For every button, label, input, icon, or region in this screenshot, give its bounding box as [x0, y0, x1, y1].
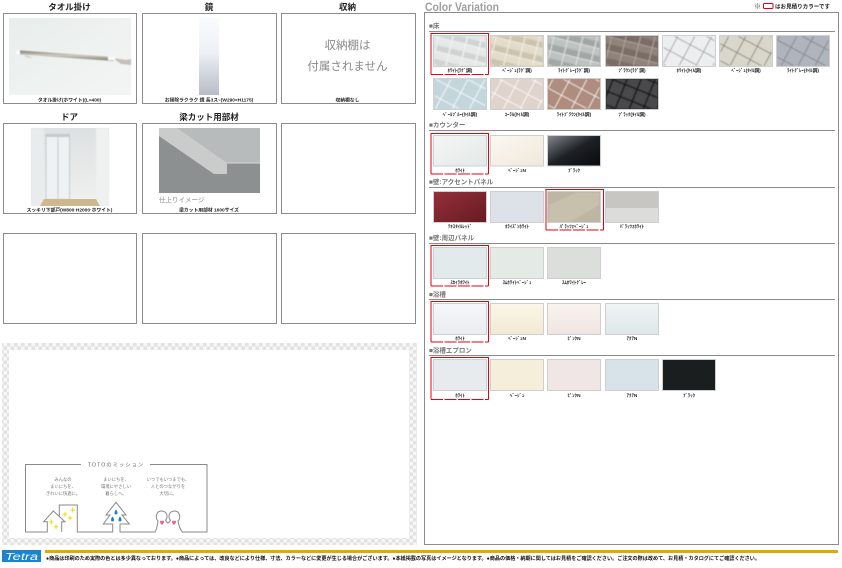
- swatch: palazzo white: ﾊﾟﾗｯﾂｫﾎﾜｲﾄ: [620, 224, 645, 230]
- heading: storage: 収納: [339, 2, 356, 12]
- estimate marker: [431, 34, 488, 74]
- swatch: beige: [490, 360, 544, 399]
- swatch: aqua N: [606, 304, 658, 342]
- swatch: beige: ﾍﾞｰｼﾞｭ: [510, 393, 525, 399]
- caption: storage: 収納棚なし: [336, 96, 360, 104]
- swatch: beige: [490, 136, 544, 174]
- caption: mirror: お掃除ラクラク 鏡 長3ス~(W290×H1175): [165, 96, 254, 104]
- estimate marker: [431, 302, 488, 342]
- swatch: light grey tile: ﾗｲﾄｸﾞﾚｰ(ﾀｲﾙ調): [787, 67, 819, 74]
- swatch: sky white: ｽｶｲﾗﾎﾜｲﾄ: [450, 280, 470, 286]
- section: bathtub: [429, 290, 835, 342]
- swatch: light brown tile: [548, 78, 600, 118]
- mission title: TOTOのミッション: [88, 462, 144, 468]
- heading: bathtub apron: ■浴槽エプロン: [429, 346, 472, 354]
- swatch: lumi white grey: ｽﾑﾎﾜｲﾄｸﾞﾚｰ: [562, 279, 587, 286]
- swatch: light grey rag: ﾗｲﾄｸﾞﾚｰ(ﾗｸﾞ調): [558, 67, 590, 74]
- swatch: beige rag: [490, 36, 544, 74]
- swatch: aqua N: [606, 360, 658, 399]
- swatch: white: ﾎﾜｲﾄ: [455, 168, 465, 174]
- swatch: beige N: [490, 304, 544, 342]
- mission text 1: まいにちを、: [50, 483, 76, 490]
- swatch: black: ﾌﾞﾗｯｸ: [683, 392, 696, 399]
- mission text 3: [147, 477, 189, 497]
- swatch: beige tile: ﾍﾞｰｼﾞｭ(ﾀｲﾙ調): [731, 67, 761, 74]
- caption: beam: 梁カット用部材 1600サイズ: [179, 206, 239, 214]
- swatch: white: [434, 360, 486, 399]
- image: mirror: [199, 18, 219, 95]
- swatch: pink N: [548, 304, 600, 342]
- heading: door: ドア: [61, 112, 78, 122]
- swatch: horizon white: [490, 192, 544, 230]
- title: Color Variation: Color Variation: [425, 2, 499, 14]
- empty panel row 2: [282, 124, 416, 214]
- mission text 3: 人とのつながりを: [151, 483, 185, 490]
- image: beam: [159, 128, 260, 193]
- estimate marker: [431, 358, 488, 400]
- panel: towel bar: [4, 14, 136, 104]
- swatch: black: [662, 360, 716, 399]
- section: accent panel: [429, 177, 835, 230]
- heading: surrounding panel: ■壁:周辺パネル: [429, 233, 475, 242]
- swatch: black: ﾌﾞﾗｯｸ: [568, 167, 581, 174]
- swatch: beige tile: [720, 36, 772, 74]
- swatch: black: [548, 136, 600, 174]
- panel: beam cut part: [142, 124, 276, 214]
- panel: storage: [282, 14, 416, 104]
- heading: bathtub: ■浴槽: [429, 290, 446, 298]
- mission text 2: 環境にやさしい: [101, 483, 131, 490]
- footer note: ●商品は印刷のため実際の色とは多少異なっております。●商品によっては、改良などにより仕様、寸法、カラーなどに変更が生じる場合がございます。●本紙掲載の写真はイメージとなります。●商品の価格・納期に関してはお見積をご確認ください。ご注文の際は改めて、お見積・カタログにてご確認ください。: [46, 554, 760, 562]
- caption: door: スッキリ下部戸(W800·H2000·ホワイト): [27, 206, 113, 214]
- mission text 2: まいにちを、: [103, 476, 129, 483]
- swatch: palazzo beige: [548, 192, 600, 230]
- swatch: lumi white beige: [490, 248, 544, 286]
- swatch: white tile: ﾎﾜｲﾄ(ﾀｲﾙ調): [677, 67, 702, 74]
- swatch: palazzo white: [606, 192, 658, 230]
- icon: hearts: [160, 521, 176, 525]
- swatch: sky white: [434, 248, 486, 286]
- panel: mirror: [142, 14, 276, 104]
- mission text 2: 暮らしへ。: [105, 490, 127, 497]
- panel: door: [4, 124, 136, 214]
- heading: counter: ■カウンター: [429, 120, 465, 129]
- image note: 仕上りイメージ: [159, 195, 205, 204]
- swatch: pink N: ﾋﾟﾝｸN: [567, 335, 581, 342]
- swatch: black tile: ﾌﾞﾗｯｸ(ﾀｲﾙ調): [618, 111, 646, 118]
- swatch: beige: ﾍﾞｰｼﾞｭN: [508, 168, 526, 174]
- estimate marker: [546, 190, 604, 230]
- heading: mirror: 鏡: [205, 2, 214, 12]
- swatch: white tile: [662, 36, 716, 74]
- icon: sparkles: [49, 508, 75, 529]
- heading: accent panel: ■壁:アクセントパネル: [429, 177, 494, 186]
- swatch: light grey rag: [548, 36, 600, 74]
- swatch: white rag: ﾎﾜｲﾄ(ﾗｸﾞ調): [448, 67, 473, 74]
- empty panel row 3 right: [282, 234, 416, 324]
- mission text 1: [46, 476, 80, 497]
- section: counter: [429, 120, 835, 174]
- TOTO mission: [26, 462, 207, 532]
- mission text 2: [101, 476, 131, 497]
- mission text 3: 大切に。: [159, 490, 177, 497]
- swatch: pink N: ﾋﾟﾝｸN: [567, 392, 581, 399]
- estimate marker: [431, 246, 488, 286]
- swatch: textile red: ﾃｷｽﾀｲﾙﾚｯﾄﾞ: [448, 223, 472, 230]
- swatch: pink N: [548, 360, 600, 399]
- notice: no storage shelf: 付属されません: [307, 60, 388, 73]
- estimate marker: [431, 134, 488, 174]
- swatch: lumi white grey: [548, 248, 600, 286]
- heading: floor: ■床: [429, 22, 440, 30]
- mission outline with houses, tree, people: [26, 464, 207, 532]
- swatch: pale blue tile: [434, 78, 486, 118]
- swatch: white: ﾎﾜｲﾄ: [455, 336, 465, 342]
- mission text 1: みんなの: [54, 476, 72, 483]
- swatch: beige N: ﾍﾞｰｼﾞｭN: [508, 336, 526, 342]
- footer rule: [45, 550, 838, 553]
- section: floor: [429, 22, 835, 118]
- swatch: textile red: [434, 192, 486, 230]
- section: surrounding panel: [429, 233, 835, 286]
- panel: checker frame: [2, 343, 417, 545]
- panel: color variation: [424, 12, 838, 544]
- logo: Tetra: Tetra: [5, 552, 39, 563]
- image: towel bar: [9, 18, 131, 95]
- swatch: light grey tile: [776, 36, 830, 74]
- swatch: palazzo beige: ﾊﾟﾗｯﾂｫﾍﾞｰｼﾞｭ: [560, 224, 589, 230]
- heading: beam cut part: 梁カット用部材: [179, 112, 239, 122]
- swatch: white: [434, 304, 486, 342]
- legend: estimate color: はお見積りカラーです: [775, 2, 830, 10]
- swatch: coral tile: ｺｰﾗﾙ(ﾀｲﾙ調): [505, 111, 530, 118]
- swatch: beige rag: ﾍﾞｰｼﾞｭ(ﾗｸﾞ調): [502, 67, 532, 74]
- swatch: black tile: [606, 78, 658, 118]
- section: bathtub apron: [429, 346, 835, 400]
- swatch: brown rag: [606, 36, 658, 74]
- mission text 1: きれいに快適に。: [46, 490, 80, 497]
- swatch: pale blue tile: ﾍﾟｰﾙﾌﾞﾙｰ(ﾀｲﾙ調): [443, 111, 478, 118]
- image: door: [31, 128, 109, 206]
- notice: no storage shelf: 収納棚は: [324, 38, 370, 52]
- legend: estimate color: [754, 2, 830, 10]
- swatch: white: [434, 136, 486, 174]
- swatch: coral tile: [490, 78, 544, 118]
- swatch: white rag: [434, 36, 486, 74]
- swatch: brown rag: ﾌﾞﾗｳﾝ(ﾗｸﾞ調): [618, 67, 646, 74]
- legend: estimate color: ※: [754, 2, 761, 10]
- empty panel row 3 left: [4, 234, 136, 324]
- heading: towel bar: タオル掛け: [48, 2, 91, 12]
- logo: Tetra: [2, 550, 41, 563]
- swatch: white: ﾎﾜｲﾄ: [455, 393, 465, 399]
- mission text 3: いつでもいつまでも、: [147, 477, 189, 482]
- notice: no storage shelf: [307, 38, 388, 73]
- caption: towel bar: タオル掛け(ホワイト)(L=400): [38, 96, 102, 104]
- swatch: aqua N: ｱｸｱN: [627, 335, 638, 342]
- swatch: lumi white beige: ｽﾑﾎﾜｲﾄﾍﾞｰｼﾞｭ: [503, 280, 532, 286]
- swatch: aqua N: ｱｸｱN: [627, 392, 638, 399]
- icon: water drops: [111, 510, 122, 522]
- empty panel row 3 middle: [142, 234, 276, 324]
- swatch: horizon white: ﾎﾗｲｽﾞﾝﾎﾜｲﾄ: [505, 224, 530, 230]
- swatch: light brown tile: ﾗｲﾄﾌﾞﾗｳﾝ(ﾀｲﾙ調): [557, 111, 592, 118]
